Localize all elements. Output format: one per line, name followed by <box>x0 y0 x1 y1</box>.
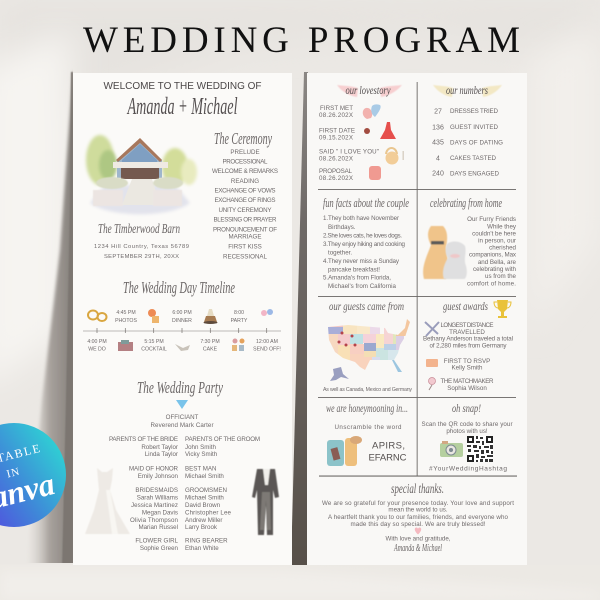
ceremony order: BLESSING OR PRAYER <box>214 216 277 224</box>
ceremony order: RECESSIONAL <box>223 254 268 260</box>
bride side names: BRIDESMAIDS <box>135 487 178 494</box>
panel: right info card <box>307 73 527 565</box>
badge: editable in Canva <box>0 423 66 527</box>
love story dates: 08.26.202X <box>319 156 353 162</box>
icon: drink <box>148 309 159 323</box>
welcome heading: WELCOME TO THE WEDDING OF <box>104 81 262 92</box>
fun facts list: together. <box>328 250 352 256</box>
icon: padlock and key <box>386 148 404 164</box>
bride side names <box>109 436 179 552</box>
section: oh snap <box>422 401 512 472</box>
officiant <box>150 414 214 429</box>
pets story text: in person, our <box>478 238 516 245</box>
groom side names <box>185 436 260 552</box>
love story dates: SAID " I LOVE YOU" <box>319 148 379 156</box>
ceremony order: PRONOUNCEMENT OF <box>213 226 277 234</box>
groom side names: Michael Smith <box>185 473 224 480</box>
groom side names: Christopher Lee <box>185 510 232 516</box>
icon: matchmaker ring <box>428 378 436 390</box>
time labels below: 7:30 PM <box>200 339 220 345</box>
time labels below: COCKTAIL <box>141 346 167 352</box>
statistics: 27 <box>434 108 442 116</box>
icon: rings <box>88 310 106 321</box>
statistics: 4 <box>436 156 440 162</box>
time labels below: 5:15 PM <box>144 339 164 345</box>
fun facts list: 2.She loves cats, he loves dogs. <box>323 232 402 240</box>
time labels above: 4:45 PM <box>116 310 136 316</box>
pink wings decoration <box>337 85 402 97</box>
unscramble prompt: Unscramble the word <box>334 424 402 431</box>
timeline chart <box>83 309 281 352</box>
illustration: black suit <box>252 469 279 535</box>
QR instructions <box>422 421 512 435</box>
ceremony order: EXCHANGE OF VOWS <box>214 188 276 194</box>
venue address: 1234 Hill Country, Texas 56789 <box>94 244 189 250</box>
statistics: 136 <box>432 124 444 132</box>
bride side names: Megan Davis <box>142 510 178 516</box>
award: the matchmaker: THE MATCHMAKER <box>440 378 494 385</box>
heading: we are honeymooning in: we are honeymooning in... <box>326 401 408 415</box>
statistics: DRESSES TRIED <box>450 108 499 115</box>
Alaska <box>330 367 349 381</box>
pets story text <box>467 216 517 287</box>
groom side names: David Brown <box>185 502 221 509</box>
heading: celebrating from home: celebrating from home <box>430 195 502 210</box>
statistics: DAYS OF DATING <box>450 140 503 146</box>
illustration: barn venue <box>86 135 197 214</box>
award: longest distance: of 2,280 miles from Germany <box>430 342 507 350</box>
thank you message: made this day so special. We are truly blessed! <box>350 521 486 528</box>
map: United States <box>328 319 410 381</box>
bride side names: FLOWER GIRL <box>135 538 179 544</box>
love story dates: 08.26.202X <box>319 175 353 182</box>
badge text <box>0 440 58 521</box>
section: special thanks <box>322 482 514 554</box>
gap shadow between panels <box>291 72 308 565</box>
illustration: white cat <box>443 242 467 279</box>
bride side names: Jessica Martinez <box>131 502 178 509</box>
fun facts list: Birthdays. <box>328 224 356 231</box>
fun facts list: Michael's from California <box>328 283 397 290</box>
statistics: GUEST INVITED <box>450 124 499 131</box>
heading: guest awards: guest awards <box>443 299 488 313</box>
venue address: SEPTEMBER 29TH, 20XX <box>104 254 179 260</box>
section: guests map <box>323 299 412 393</box>
icon: party people <box>232 338 244 351</box>
heading: special thanks: special thanks. <box>391 482 444 497</box>
icon: trophy <box>494 300 511 318</box>
section: celebrating from home <box>423 195 517 287</box>
section: fun facts <box>323 195 409 290</box>
icon: camera <box>440 441 463 457</box>
bride side names: Emily Johnson <box>138 473 179 480</box>
scrambled word <box>368 440 407 464</box>
award: first to RSVP <box>444 358 490 372</box>
hashtag: #YourWeddingHashtag <box>429 466 507 472</box>
QR instructions: photos with us! <box>446 428 488 435</box>
icon: pink heart <box>415 528 421 534</box>
heading: our numbers: our numbers <box>446 83 488 97</box>
section: love story <box>319 83 404 182</box>
sign off: With love and gratitude, <box>385 536 451 542</box>
venue name: The Timberwood Barn <box>98 222 180 237</box>
statistics: 435 <box>432 140 444 146</box>
award: longest distance: LONGEST DISTANCE <box>440 322 494 329</box>
section: guest awards <box>423 299 513 392</box>
time labels above: 6:00 PM <box>172 310 192 316</box>
officiant: OFFICIANT <box>166 414 199 421</box>
award: the matchmaker: Sophia Wilson <box>447 385 487 392</box>
groom side names: John Smith <box>185 444 217 451</box>
pets story text: Our Furry Friends <box>467 216 516 223</box>
QR code <box>467 436 493 462</box>
heading: wedding party: The Wedding Party <box>137 378 223 397</box>
panel: left program card <box>73 73 292 565</box>
ceremony order: READING <box>231 178 259 185</box>
icon: shoes <box>175 344 190 351</box>
bride side names: MAID OF HONOR <box>129 466 179 472</box>
illustration: golden dog <box>423 226 448 279</box>
time labels below: 4:00 PM <box>87 339 107 345</box>
section: our numbers <box>432 83 503 178</box>
heading: our guests came from: our guests came from <box>329 299 404 313</box>
ceremony order: FIRST KISS <box>228 244 262 250</box>
award: the matchmaker <box>440 378 494 392</box>
time labels below: SEND OFF! <box>253 346 281 352</box>
pets story text: companions, Max <box>469 252 517 259</box>
icon: flowers <box>426 359 438 367</box>
signature: Amanda & Michael <box>393 543 442 554</box>
pets story text: cherished <box>489 245 517 252</box>
statistics: 240 <box>432 170 444 178</box>
main title: WEDDING PROGRAM <box>83 20 520 61</box>
icon: balloons <box>261 309 273 316</box>
pets story text: couldn't be here <box>472 230 517 237</box>
time labels below <box>87 339 281 352</box>
ceremony order: UNITY CEREMONY <box>218 207 272 214</box>
award: longest distance: TRAVELLED <box>449 329 485 336</box>
ceremony order: MARRIAGE <box>228 234 262 240</box>
love story dates: 08.26.202X <box>319 112 353 119</box>
time labels above: PHOTOS <box>115 318 137 324</box>
scrambled word: EFARNC <box>368 452 407 464</box>
love story dates <box>319 105 379 182</box>
fun facts list: 3.They enjoy hiking and cooking <box>323 241 406 248</box>
thank you message: mean the world to us. <box>388 506 448 514</box>
fun facts list: 5.Amanda's from Florida, <box>323 274 391 282</box>
heading: oh snap: oh snap! <box>452 401 481 415</box>
ceremony order: PROCESSIONAL <box>222 158 268 166</box>
fun facts list: 1.They both have November <box>323 215 399 222</box>
thank you message: We are so grateful for your presence today. Your love and support <box>322 500 514 507</box>
time labels below: CAKE <box>203 346 218 352</box>
groom side names: Larry Brook <box>185 524 218 531</box>
fun facts list: 4.They never miss a Sunday <box>323 258 400 265</box>
icon: blue diamond <box>176 400 188 409</box>
time labels above: 8:00 <box>234 310 244 316</box>
bride side names: Olivia Thompson <box>130 517 179 524</box>
love story dates: PROPOSAL <box>319 168 353 175</box>
ceremony order: PRELUDE <box>230 149 260 156</box>
statistics: DAYS ENGAGED <box>450 170 500 178</box>
groom side names: Ethan White <box>185 545 219 552</box>
section: honeymoon <box>326 401 408 466</box>
fun facts list <box>323 215 406 290</box>
bride side names: Linda Taylor <box>145 451 178 458</box>
map caption: As well as Canada, Mexico and Germany <box>323 387 412 393</box>
love story dates: FIRST DATE <box>319 128 355 134</box>
bride side names: Marian Russel <box>138 524 178 531</box>
statistics: CAKES TASTED <box>450 155 497 162</box>
illustration: wedding dress <box>85 468 130 534</box>
groom side names: RING BEARER <box>185 538 228 544</box>
scrambled word: APIRS, <box>372 440 405 452</box>
pets story text: us from the <box>485 273 517 280</box>
love story dates: 09.15.202X <box>319 134 353 142</box>
pets story text: comfort of home. <box>467 280 516 287</box>
time labels above: PARTY <box>231 318 248 324</box>
heading: fun facts: fun facts about the couple <box>323 195 409 210</box>
gold wings decoration <box>433 85 502 97</box>
time labels below: 12:00 AM <box>256 339 278 345</box>
ceremony order: EXCHANGE OF RINGS <box>214 197 276 204</box>
time labels below: WE DO <box>88 346 106 352</box>
ceremony order: The Ceremony <box>214 129 272 148</box>
couple names: Amanda + Michael <box>126 94 238 120</box>
groom side names: GROOMSMEN <box>185 487 227 494</box>
award: longest distance: Bethany Anderson traveled a total <box>423 336 513 342</box>
ceremony order <box>212 129 278 260</box>
fun facts list: pancake breakfast! <box>328 266 380 274</box>
groom side names: Michael Smith <box>185 495 224 502</box>
groom side names: BEST MAN <box>185 466 217 472</box>
groom side names: Andrew Miller <box>185 517 222 524</box>
ceremony order: WELCOME & REMARKS <box>212 168 278 175</box>
thank you message: A heartfelt thank you to our families, friends, and everyone who <box>328 514 509 521</box>
bride side names: PARENTS OF THE BRIDE <box>109 436 178 443</box>
icon: rose and red dress <box>364 122 396 139</box>
bride side names: Sarah Williams <box>137 495 178 502</box>
groom side names: PARENTS OF THE GROOM <box>185 436 260 443</box>
icon: suitcases <box>327 436 362 466</box>
thank you message <box>322 500 514 528</box>
grid dividers <box>318 82 517 477</box>
statistics <box>432 108 503 178</box>
award: first to RSVP: Kelly Smith <box>452 364 483 372</box>
card shadow on wall <box>32 70 73 563</box>
icon: cake <box>204 309 218 324</box>
officiant: Reverend Mark Carter <box>150 422 214 429</box>
award: longest distance <box>423 322 513 350</box>
heading: timeline: The Wedding Day Timeline <box>123 278 235 297</box>
bride side names: Robert Taylor <box>141 444 178 451</box>
icon: airplane <box>425 322 439 336</box>
QR instructions: Scan the QR code to share your <box>422 421 512 428</box>
map pins <box>338 332 356 346</box>
bride side names: Sophie Green <box>140 545 179 552</box>
time labels above: DINNER <box>172 318 192 324</box>
icon: hearts <box>363 104 381 119</box>
pets story text: and Bella, are <box>478 259 517 266</box>
time labels above <box>115 310 248 324</box>
love story dates: FIRST MET <box>320 105 353 112</box>
icon: camera <box>118 340 133 351</box>
pets story text: While they <box>487 223 517 230</box>
icon: pink telephone <box>369 166 381 180</box>
award: first to RSVP: FIRST TO RSVP <box>444 358 490 365</box>
pets story text: celebrating with <box>473 266 517 273</box>
groom side names: Vicky Smith <box>185 451 218 458</box>
badge text: IN <box>5 466 22 481</box>
venue address <box>94 244 189 260</box>
heading: our lovestory: our lovestory <box>346 83 391 97</box>
